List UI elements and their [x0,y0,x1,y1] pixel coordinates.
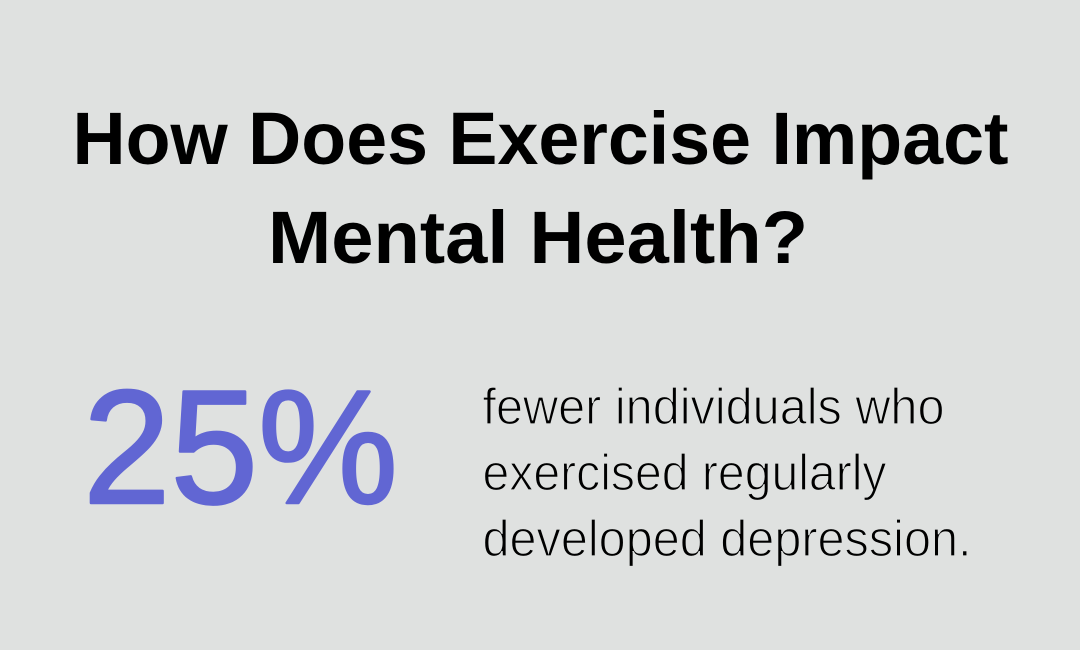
title [72,97,1008,279]
description text: exercised regularly [482,444,887,501]
title: Mental Health? [268,196,808,279]
title: How Does Exercise Impact [72,97,1008,180]
statistic: 25%: 25% [83,357,398,538]
description text: fewer individuals who [482,378,944,435]
description text: developed depression. [482,510,972,567]
description text [482,378,972,567]
